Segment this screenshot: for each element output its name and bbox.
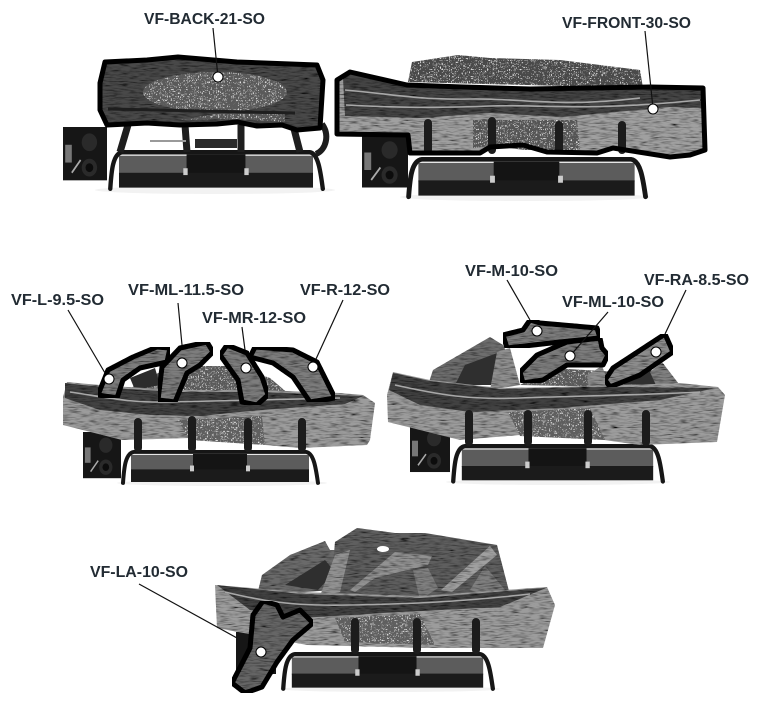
rear logs <box>428 337 682 395</box>
control valve <box>236 632 276 674</box>
grate assembly <box>280 654 500 692</box>
grate assembly <box>446 446 670 485</box>
log: VF-RA-8.5-SO <box>605 334 673 387</box>
label: VF-LA-10-SO: VF-LA-10-SO <box>90 564 188 581</box>
leader: VF-BACK-21-SO <box>213 28 218 77</box>
leader lines <box>507 280 686 356</box>
marker dot <box>256 647 266 657</box>
log: VF-L-9.5-SO <box>98 347 170 398</box>
front log body <box>63 382 375 448</box>
front log body <box>337 72 705 157</box>
marker dots <box>104 358 318 384</box>
label: VF-M-10-SO: VF-M-10-SO <box>465 263 558 280</box>
grate tines <box>469 414 646 442</box>
control valve <box>83 432 121 478</box>
panel: top logs set two <box>387 263 749 485</box>
panel: back log <box>63 11 335 194</box>
label: VF-MR-12-SO: VF-MR-12-SO <box>202 310 306 327</box>
control valve <box>63 127 107 180</box>
grate assembly <box>400 159 650 201</box>
marker dot <box>648 104 658 114</box>
label: VF-RA-8.5-SO: VF-RA-8.5-SO <box>644 272 749 289</box>
log: VF-ML-11.5-SO <box>158 342 213 402</box>
leader: VF-FRONT-30-SO <box>645 31 653 108</box>
outline: back log <box>100 57 323 130</box>
control valve <box>410 425 450 472</box>
label: VF-R-12-SO: VF-R-12-SO <box>300 282 390 299</box>
grate assembly <box>117 452 327 486</box>
log: VF-M-10-SO <box>503 320 600 348</box>
label: VF-ML-11.5-SO: VF-ML-11.5-SO <box>128 282 244 299</box>
front log body <box>215 585 555 648</box>
log: VF-ML-10-SO <box>520 338 608 383</box>
rear centre log <box>118 366 290 395</box>
back log body <box>100 57 323 130</box>
log: VF-LA-10-SO <box>232 601 313 693</box>
back log behind <box>408 55 643 88</box>
label: VF-ML-10-SO: VF-ML-10-SO <box>562 294 664 311</box>
label: VF-L-9.5-SO: VF-L-9.5-SO <box>11 292 104 309</box>
panel: front log <box>337 15 705 201</box>
marker dots <box>532 326 661 361</box>
panel: full assembly <box>90 528 555 693</box>
panel: top logs set one <box>11 282 390 486</box>
label: VF-FRONT-30-SO: VF-FRONT-30-SO <box>562 15 691 32</box>
log: VF-MR-12-SO <box>220 345 268 405</box>
front log body <box>387 372 725 445</box>
stacked logs <box>257 528 510 600</box>
grate tines <box>428 121 622 150</box>
leader: VF-LA-10-SO <box>139 584 237 638</box>
grate assembly <box>95 124 335 194</box>
grate tines <box>138 420 302 448</box>
control valve <box>362 135 408 188</box>
outline: front log <box>337 72 705 157</box>
label: VF-BACK-21-SO: VF-BACK-21-SO <box>144 11 265 28</box>
leader lines <box>68 300 343 373</box>
marker dot <box>213 72 223 82</box>
log: VF-R-12-SO <box>250 347 335 402</box>
grate tines <box>355 622 476 650</box>
